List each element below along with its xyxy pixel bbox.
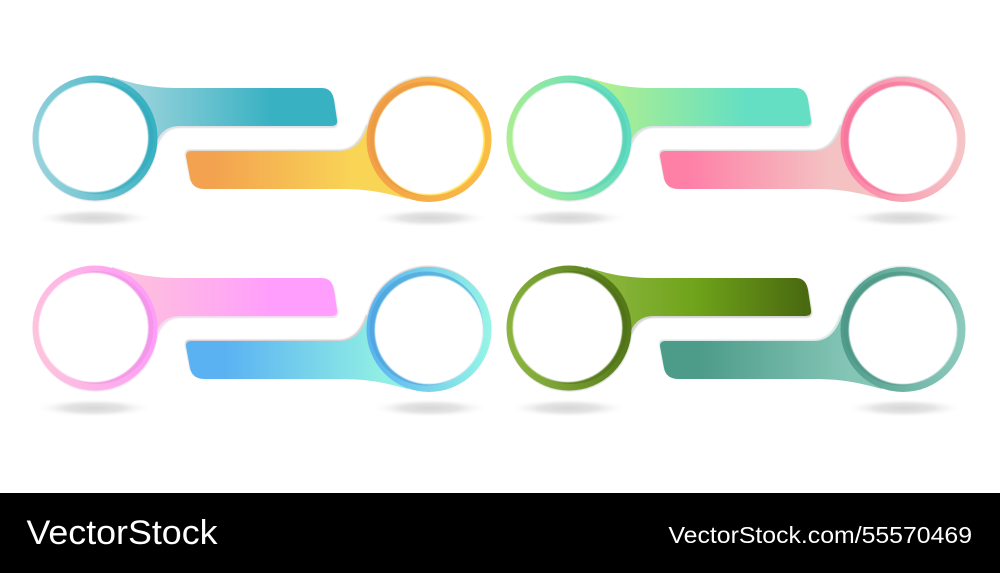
olive circle banner — [506, 266, 812, 392]
drop shadows — [508, 398, 964, 418]
banner pair 2: green and pink — [506, 76, 966, 228]
banner pair 1: teal and orange — [32, 76, 492, 228]
sea green circle banner — [659, 266, 966, 392]
orange circle banner — [185, 76, 492, 202]
footer bar — [0, 493, 1000, 573]
pink circle banner — [659, 76, 966, 202]
drop shadows — [34, 398, 490, 418]
blue circle banner — [185, 266, 492, 392]
green circle banner — [506, 76, 812, 202]
brand wordmark: VectorStock — [26, 514, 218, 552]
drop shadows — [508, 208, 964, 228]
light pink circle banner — [32, 266, 338, 392]
banner pair 4: olive and sea green — [506, 266, 966, 418]
teal circle banner — [32, 76, 338, 202]
banner pair 3: pink and blue — [32, 266, 492, 418]
drop shadows — [34, 208, 490, 228]
image reference: VectorStock.com/55570469 — [668, 522, 972, 548]
